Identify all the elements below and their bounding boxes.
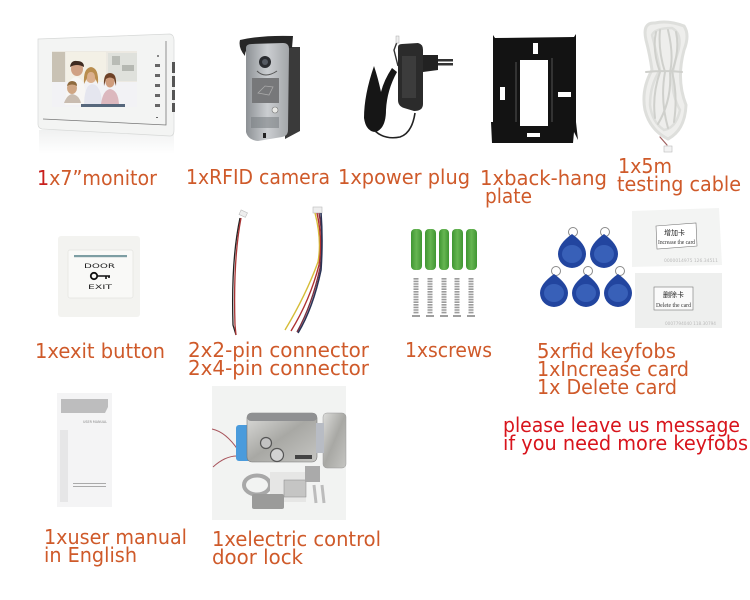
icon: power plug adapter	[364, 36, 453, 138]
label: 1xback-hang plate: plate	[485, 184, 532, 208]
icon: door exit button: DOOR	[84, 262, 116, 270]
label: keyfobs and cards: 1x Delete card	[537, 375, 677, 399]
icon: 7 inch monitor	[38, 34, 175, 154]
icon: green wall plugs and screws	[411, 229, 477, 316]
icon: delete card: 删除卡	[663, 290, 684, 300]
label: electric door lock: door lock	[212, 545, 303, 569]
icon: increase card: 增加卡	[664, 228, 685, 238]
label: user manual: in English	[44, 543, 137, 567]
label: user manual: 1xuser manual	[44, 525, 187, 549]
label: 1x5m testing cable: testing cable	[617, 172, 741, 196]
callout: more keyfobs message: if you need more keyfobs	[503, 431, 748, 455]
label: electric door lock	[212, 527, 381, 569]
icon: 4-pin connector wires	[285, 207, 322, 333]
label: keyfobs and cards: 1xIncrease card	[537, 357, 689, 381]
icon: five blue RFID keyfobs	[540, 228, 632, 307]
label: 1xscrews: 1xscrews	[405, 338, 492, 362]
icon: increase card	[632, 208, 722, 267]
icon: door exit button: EXIT	[88, 284, 113, 291]
icon: delete card: Delete the card	[656, 302, 692, 309]
label: connectors	[188, 338, 370, 380]
icon: 2-pin connector wire	[233, 210, 247, 335]
icon: back-hang plate	[491, 34, 578, 143]
label: electric door lock: 1xelectric control	[212, 527, 381, 551]
icon: door exit button	[58, 236, 140, 317]
label: keyfobs and cards	[537, 339, 689, 399]
label: 1x5m testing cable	[617, 154, 741, 196]
icon: increase card: 0000014975 126.34511	[664, 258, 718, 263]
label: 1xback-hang plate: 1xback-hang	[480, 166, 607, 190]
label: 1x5m testing cable: 1x5m	[618, 154, 672, 178]
icon: user manual: USER MANUAL	[83, 420, 107, 424]
callout: more keyfobs message: please leave us message	[503, 413, 740, 437]
label: keyfobs and cards: 5xrfid keyfobs	[537, 339, 676, 363]
icon: electric door lock	[212, 386, 346, 520]
icon: RFID camera	[240, 36, 300, 141]
label: connectors: 2x4-pin connector	[188, 356, 370, 380]
label: 1xexit button: 1xexit button	[35, 339, 165, 363]
label: 1xback-hang plate	[480, 166, 607, 208]
label: 1x7"monitor: 1x7”monitor	[37, 166, 158, 190]
icon: delete card: 0007794040 118.30794	[665, 321, 716, 326]
label: 1xpower plug: 1xpower plug	[338, 165, 470, 189]
icon: delete card	[635, 273, 722, 328]
icon: user manual	[57, 393, 112, 507]
label: user manual	[44, 525, 187, 567]
icon: increase card: Increase the card	[658, 239, 696, 246]
icon: coiled testing cable	[644, 22, 687, 152]
callout: more keyfobs message	[503, 413, 748, 455]
label: connectors: 2x2-pin connector	[188, 338, 370, 362]
label: 1xRFID camera: 1xRFID camera	[186, 165, 330, 189]
